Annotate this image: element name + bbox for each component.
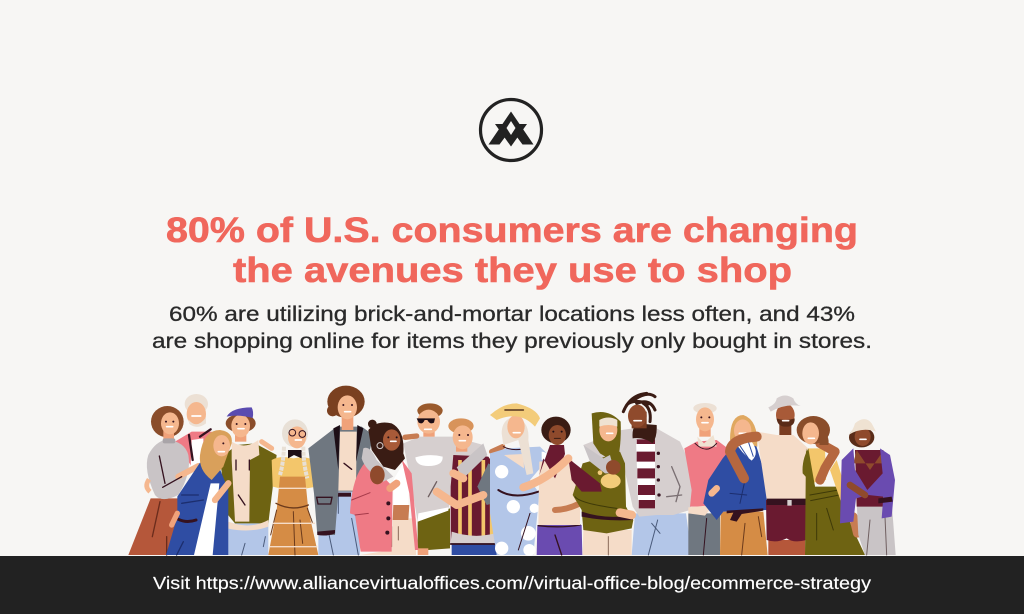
person: woman in blue sweater and orange trousers bbox=[703, 415, 768, 555]
person: woman in grey sweater and brown skirt bbox=[128, 406, 198, 555]
person: man in grey t-shirt and olive shorts bbox=[403, 403, 487, 555]
person: man in pink shirt bbox=[684, 403, 730, 555]
title: the avenues they use to shop bbox=[233, 251, 792, 290]
person: older man with pink jacket bbox=[175, 394, 215, 467]
subtitle text block: are shopping online for items they previously only bought in stores. bbox=[152, 330, 872, 353]
title bbox=[166, 211, 858, 290]
footer link text: Visit https://www.alliancevirtualoffices.com//virtual-office-blog/ecommerce-strategy bbox=[153, 573, 871, 593]
arm: cream-vest woman's sleeve and hand over the hoodie bbox=[523, 458, 602, 492]
person: woman in orange dress with white braids bbox=[268, 419, 318, 555]
title: 80% of U.S. consumers are changing bbox=[166, 211, 858, 250]
person: bearded man in cream shirt and bucket hat bbox=[730, 395, 811, 555]
illustration: group of diverse people bbox=[128, 386, 896, 556]
person: woman in purple jacket and bucket hat bbox=[840, 419, 896, 555]
left half of the crowd bbox=[128, 386, 503, 555]
footer bar bbox=[0, 556, 1024, 614]
person: man with dreadlocks in grey jacket and striped shirt bbox=[583, 393, 697, 555]
subtitle text block: 60% are utilizing brick-and-mortar locations less often, and 43% bbox=[169, 303, 855, 326]
person: woman in cloud-print dress and straw hat bbox=[490, 403, 550, 556]
right half of the crowd bbox=[490, 393, 896, 556]
icon: Alliance logo bbox=[480, 100, 542, 160]
person: woman in blue jacket bbox=[166, 430, 232, 555]
subtitle text block bbox=[152, 303, 872, 353]
person: person in olive hoodie bbox=[573, 412, 633, 555]
person: woman in olive pinafore dress bbox=[797, 416, 865, 555]
person: woman in pink cardigan bbox=[350, 420, 418, 555]
person: woman in maroon turtleneck and cream vest bbox=[537, 417, 582, 555]
person: man in olive jacket and purple cap bbox=[220, 407, 277, 555]
person: young man in striped vest bbox=[437, 418, 503, 555]
person: tall man in grey coat bbox=[308, 386, 373, 555]
